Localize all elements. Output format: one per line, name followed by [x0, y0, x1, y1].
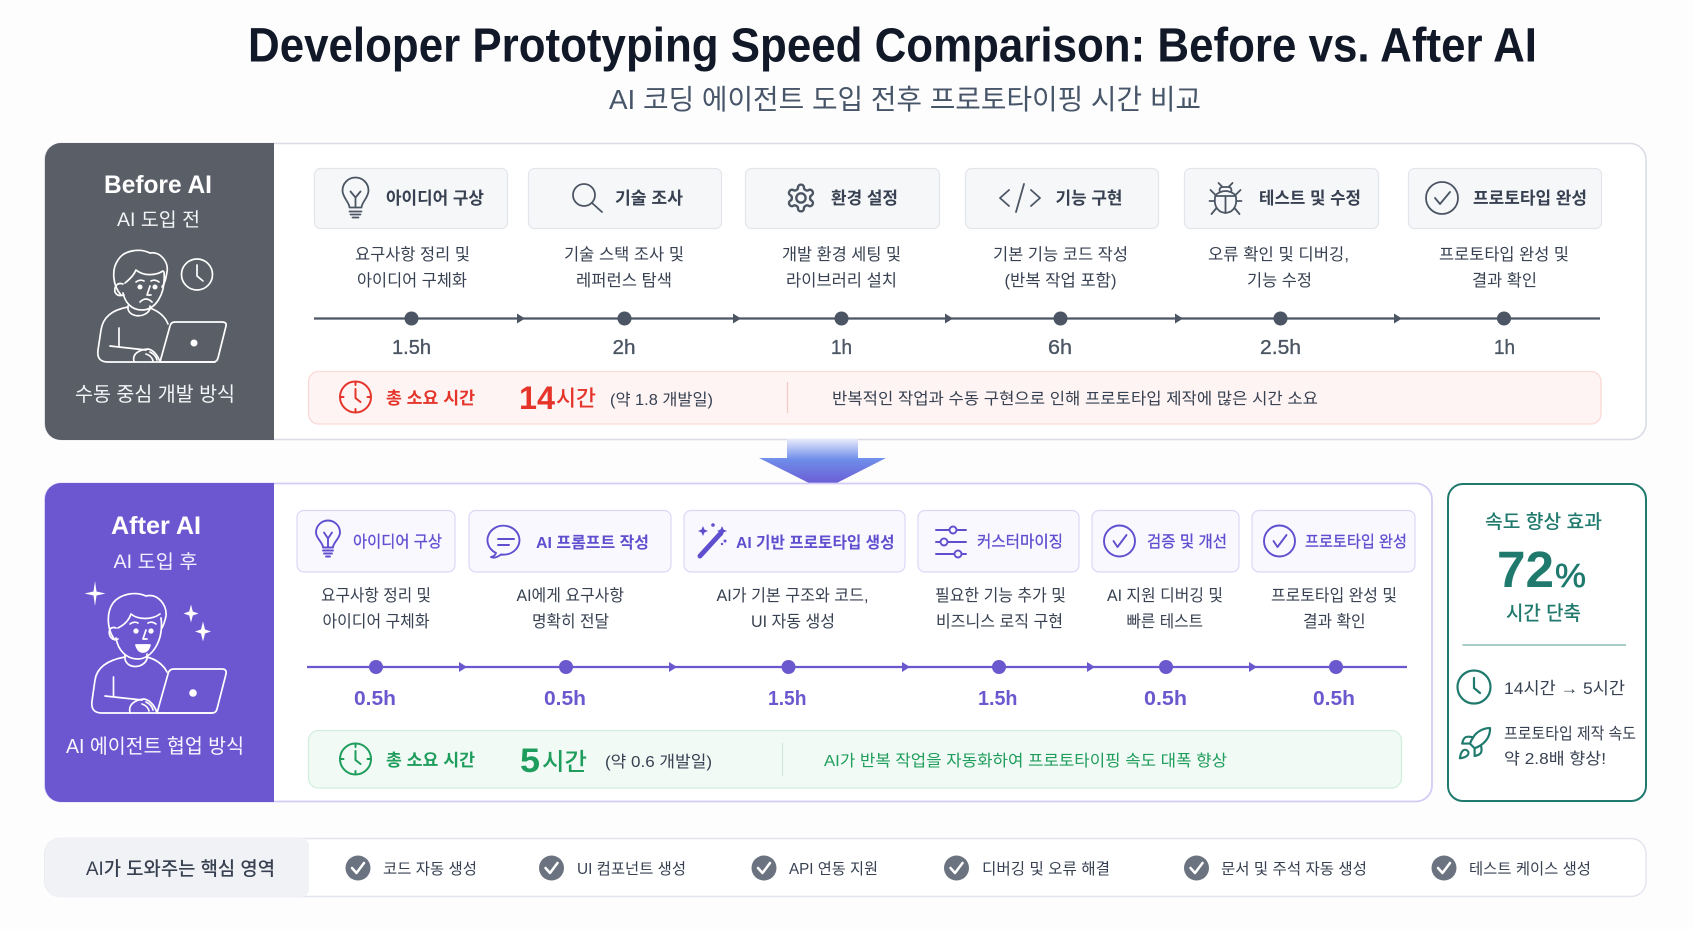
item: code generation: 코드 자동 생성	[383, 860, 477, 878]
step 6: complete	[1408, 168, 1602, 228]
step descriptions: UI 자동 생성	[751, 612, 835, 631]
sidebar caption: AI 에이전트 협업 방식	[66, 735, 244, 758]
step 1: idea	[314, 168, 508, 228]
label: 아이디어 구상	[353, 533, 442, 551]
durations: 2h	[612, 337, 636, 359]
timeline: after AI	[307, 660, 1407, 710]
label: 아이디어 구상	[386, 189, 484, 208]
step 6: complete	[1252, 510, 1415, 572]
total bar: after AI	[308, 730, 1402, 788]
icon: code brackets	[1000, 184, 1040, 212]
durations: 6h	[1048, 337, 1072, 359]
big percentage	[1497, 541, 1586, 598]
durations	[392, 337, 1515, 359]
total bar: before AI	[308, 372, 1601, 424]
step descriptions: 개발 환경 세팅 및	[782, 245, 901, 264]
label: 테스트 및 수정	[1259, 189, 1361, 208]
step descriptions: 아이디어 구체화	[357, 271, 467, 290]
step descriptions: 기본 기능 코드 작성	[993, 245, 1128, 264]
item: test cases: 테스트 케이스 생성	[1469, 860, 1591, 878]
icon: sliders	[936, 526, 966, 558]
icon: clock	[1458, 670, 1490, 704]
icon: chat bubble	[487, 526, 519, 558]
sidebar caption: 수동 중심 개발 방식	[75, 383, 235, 406]
item: docs	[1184, 856, 1367, 880]
step descriptions: 프로토타입 완성 및	[1439, 245, 1569, 264]
item: API integration: API 연동 지원	[789, 860, 878, 878]
title: Developer Prototyping Speed Comparison: Before vs. After AI	[248, 20, 1537, 72]
step descriptions: 결과 확인	[1303, 612, 1366, 631]
icon: check circle	[1104, 526, 1135, 556]
step descriptions	[355, 245, 1569, 290]
item: UI components: UI 컴포넌트 생성	[577, 860, 686, 878]
label: 기능 구현	[1056, 189, 1122, 208]
step descriptions: 기능 수정	[1247, 271, 1312, 290]
label: 커스터마이징	[977, 533, 1063, 551]
panel: before AI	[45, 143, 1646, 440]
panel: speed improvement	[1448, 484, 1646, 801]
icon: check circle	[1264, 526, 1295, 556]
icon: wall clock	[182, 259, 212, 290]
step 3: environment	[746, 168, 940, 228]
illustration: happy developer with sparkles	[92, 594, 226, 713]
icon: rocket	[1460, 728, 1490, 758]
step 2: research	[528, 168, 722, 228]
label: AI 프롬프트 작성	[536, 534, 649, 552]
step descriptions: AI에게 요구사항	[516, 586, 624, 605]
speed note: 약 2.8배 향상!	[1504, 750, 1606, 768]
icon: check circle	[1426, 182, 1458, 214]
big percentage: %	[1555, 557, 1586, 594]
durations: 1.5h	[392, 337, 431, 359]
total note: (약 1.8 개발일)	[610, 391, 713, 409]
step 5: test	[1184, 168, 1378, 228]
percentage caption: 시간 단축	[1506, 602, 1581, 625]
panel: key AI assistance areas	[45, 838, 1646, 897]
total value	[519, 380, 596, 416]
summary text: 반복적인 작업과 수동 구현으로 인해 프로토타입 제작에 많은 시간 소요	[832, 390, 1318, 408]
step descriptions: 라이브러리 설치	[786, 271, 897, 290]
total value: 시간	[542, 749, 587, 776]
total value: 14	[519, 380, 555, 416]
icon: red clock	[340, 382, 371, 412]
durations	[354, 688, 1355, 710]
step descriptions: 아이디어 구체화	[322, 612, 430, 631]
sidebar subheading: AI 도입 후	[114, 551, 198, 573]
total value: 시간	[556, 386, 596, 411]
item: debugging: 디버깅 및 오류 해결	[982, 860, 1110, 878]
item: API integration	[752, 856, 878, 880]
durations: 0.5h	[1313, 688, 1355, 710]
step descriptions	[321, 586, 1397, 631]
durations: 2.5h	[1260, 337, 1301, 359]
item: test cases	[1432, 856, 1591, 880]
label: 프로토타입 완성	[1473, 189, 1587, 208]
step descriptions: 요구사항 정리 및	[355, 245, 470, 264]
sidebar: before AI	[45, 143, 274, 440]
speed note	[1504, 725, 1636, 768]
heading pill	[45, 838, 309, 897]
time comparison: 14시간 → 5시간	[1504, 679, 1625, 698]
icon: light bulb	[316, 520, 340, 556]
item: code generation	[346, 856, 477, 880]
durations: 1h	[1494, 337, 1515, 359]
illustration: stressed developer at laptop	[98, 250, 226, 362]
sidebar heading: Before AI	[104, 171, 212, 199]
durations: 1h	[831, 337, 852, 359]
icon: sparkles	[84, 581, 211, 642]
icon: green clock	[340, 744, 371, 774]
label: 기술 조사	[615, 189, 683, 208]
item: UI components	[539, 856, 686, 880]
label: 환경 설정	[831, 189, 898, 208]
step descriptions: AI가 기본 구조와 코드,	[716, 586, 868, 605]
step descriptions: 필요한 기능 추가 및	[935, 586, 1066, 605]
durations: 0.5h	[1144, 688, 1187, 710]
arrow: before to after	[759, 439, 886, 490]
heading pill: AI가 도와주는 핵심 영역	[86, 858, 275, 880]
item: docs: 문서 및 주석 자동 생성	[1221, 860, 1367, 878]
panel heading: 속도 향상 효과	[1485, 511, 1602, 533]
total label: 총 소요 시간	[386, 389, 475, 408]
icon: magnifier	[573, 184, 602, 212]
durations: 1.5h	[768, 688, 806, 710]
step 3: AI generation	[684, 510, 905, 572]
sidebar subheading: AI 도입 전	[117, 209, 200, 231]
subtitle: AI 코딩 에이전트 도입 전후 프로토타이핑 시간 비교	[609, 84, 1201, 115]
step descriptions: 오류 확인 및 디버깅,	[1208, 245, 1349, 264]
step 1: idea	[297, 510, 455, 572]
step 4: build	[966, 168, 1158, 228]
step 5: verify	[1092, 510, 1239, 572]
step 2: prompt	[469, 510, 671, 572]
step descriptions: 빠른 테스트	[1126, 612, 1203, 631]
step descriptions: 결과 확인	[1472, 271, 1537, 290]
label: 프로토타입 완성	[1305, 533, 1407, 551]
panel: after AI	[45, 483, 1432, 802]
label: 검증 및 개선	[1147, 533, 1227, 551]
icon: magic wand	[698, 523, 727, 556]
step descriptions: (반복 작업 포함)	[1004, 271, 1116, 290]
total value	[520, 742, 587, 780]
step descriptions: 프로토타입 완성 및	[1271, 586, 1397, 605]
step descriptions: 기술 스택 조사 및	[564, 245, 684, 264]
durations: 0.5h	[544, 688, 586, 710]
summary text: AI가 반복 작업을 자동화하여 프로토타이핑 속도 대폭 향상	[824, 752, 1227, 770]
step descriptions: 레퍼런스 탐색	[576, 271, 672, 290]
step descriptions: AI 지원 디버깅 및	[1107, 586, 1223, 605]
durations: 1.5h	[978, 688, 1018, 710]
step descriptions: 요구사항 정리 및	[321, 586, 431, 605]
durations: 0.5h	[354, 688, 396, 710]
timeline: before AI	[314, 312, 1600, 359]
icon: bug	[1210, 183, 1242, 214]
icon: light bulb	[342, 178, 368, 218]
step descriptions: 명확히 전달	[532, 612, 609, 631]
step 4: customizing	[918, 510, 1079, 572]
total label: 총 소요 시간	[386, 751, 475, 770]
big percentage: 72	[1497, 541, 1554, 598]
sidebar: after AI	[45, 483, 274, 802]
speed note: 프로토타입 제작 속도	[1504, 725, 1636, 743]
total value: 5	[520, 742, 540, 780]
sidebar heading: After AI	[111, 512, 201, 540]
total note: (약 0.6 개발일)	[605, 753, 712, 771]
item: debugging	[944, 856, 1110, 880]
label: AI 기반 프로토타입 생성	[736, 534, 894, 552]
step descriptions: 비즈니스 로직 구현	[936, 612, 1063, 631]
icon: gear	[789, 185, 813, 211]
